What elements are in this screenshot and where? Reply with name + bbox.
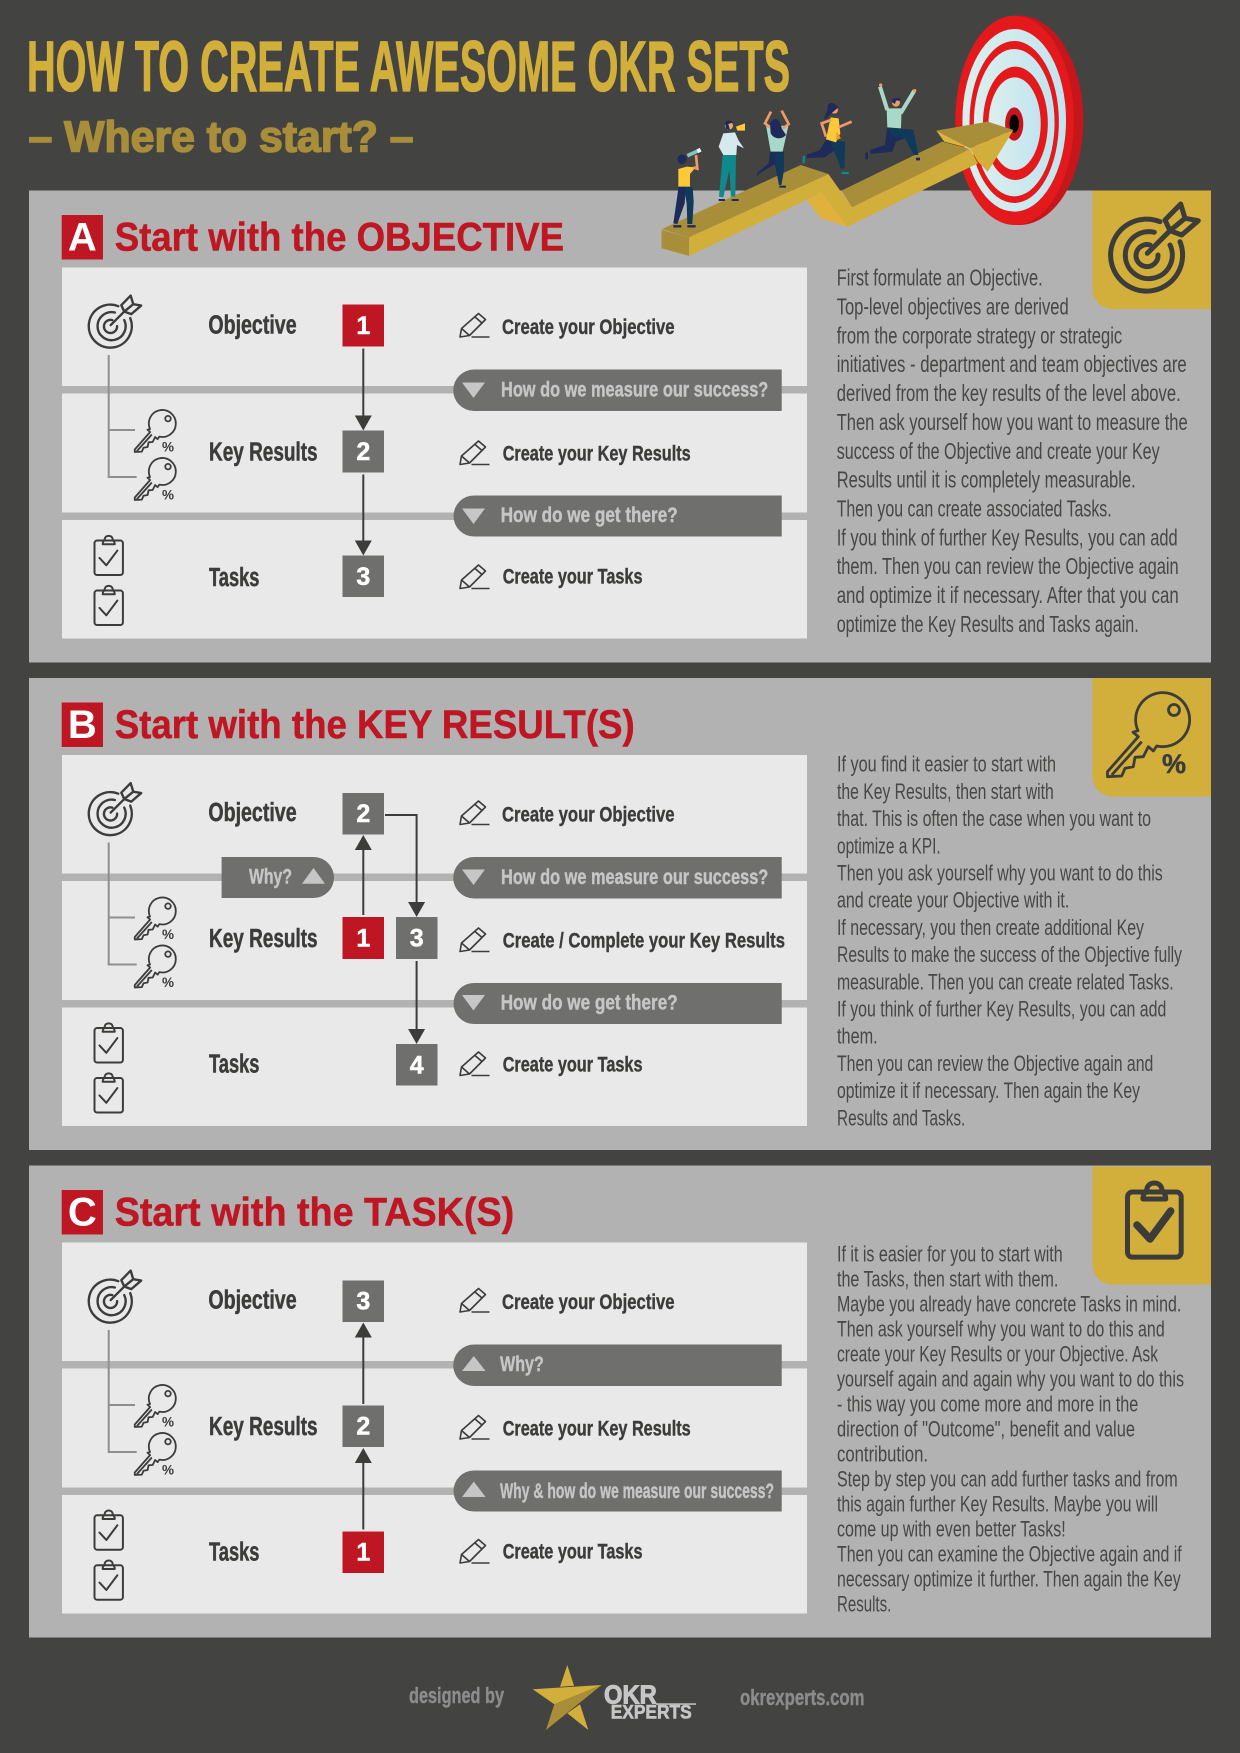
- icons: key results: [135, 1385, 176, 1477]
- step 1: 1: [356, 924, 370, 952]
- icons: key results: %: [162, 927, 174, 942]
- row labels: Key Results: [209, 1413, 318, 1441]
- body text B: the Key Results, then start with: [837, 779, 1054, 804]
- icons: tasks: [94, 1023, 123, 1113]
- icon: objective target: [89, 296, 141, 348]
- panel: B start with the key results: [29, 678, 1211, 1150]
- create actions: Create your Objective: [502, 1291, 675, 1314]
- create actions: Create your Objective: [502, 316, 675, 339]
- connector lines: [109, 842, 137, 964]
- step 4: [396, 1044, 438, 1086]
- callout: how do we measure: [453, 857, 782, 898]
- logo: OKR Experts star: EXPERTS: [611, 1701, 692, 1723]
- row labels: Tasks: [209, 1538, 259, 1566]
- body text A: Then you can create associated Tasks.: [837, 496, 1112, 522]
- create actions: Create your Key Results: [503, 442, 691, 466]
- icons: key results: [135, 897, 176, 990]
- step 1: 1: [356, 312, 370, 340]
- body text C: direction of "Outcome", benefit and value: [837, 1417, 1135, 1442]
- step 2: [342, 1406, 384, 1447]
- flow arrows: [355, 348, 372, 556]
- flow arrows: [355, 815, 425, 1044]
- level rows: [62, 755, 807, 1126]
- gold corner with clipboard icon: [1092, 1166, 1211, 1284]
- callout: how do we get there: How do we get there?: [501, 504, 678, 527]
- flow arrows: [355, 1322, 372, 1530]
- icons: key results: %: [162, 975, 174, 990]
- target board: [955, 16, 1083, 225]
- body text B: optimize a KPI.: [837, 833, 941, 858]
- gold corner with key icon: [1092, 678, 1211, 796]
- icon: objective target: [89, 1271, 141, 1323]
- level rows: [62, 1242, 807, 1614]
- icons: tasks: [94, 1511, 123, 1600]
- heading B: Start with the KEY RESULT(S): [115, 703, 635, 747]
- callout: how do we measure: How do we measure our success?: [501, 866, 768, 889]
- body text A: First formulate an Objective.: [837, 265, 1043, 291]
- callout: how do we get there: How do we get there?: [501, 992, 678, 1014]
- create actions: Create your Tasks: [503, 1540, 642, 1564]
- body text A: [837, 265, 1188, 637]
- level rows: [62, 268, 807, 638]
- body text B: and create your Objective with it.: [837, 888, 1069, 913]
- badge A: A: [68, 216, 97, 260]
- icons: key results: %: [162, 1414, 174, 1430]
- icons: key results: %: [162, 487, 174, 502]
- body text B: [837, 752, 1182, 1130]
- body text A: Top-level objectives are derived: [837, 294, 1069, 320]
- callout: how do we get there: [453, 496, 782, 536]
- step 1: [342, 917, 384, 959]
- callout: how do we measure: [453, 370, 782, 411]
- person with megaphone: [719, 120, 745, 200]
- panel: A start with the objective: [29, 190, 1211, 662]
- panel background C: [29, 1166, 1211, 1638]
- hero illustration: target and arrow: [662, 16, 1083, 256]
- row labels: Objective: [208, 799, 297, 827]
- person with raised arms and long hair: [757, 111, 789, 187]
- body text A: Results until it is completely measurable.: [837, 467, 1136, 493]
- step 4: 4: [410, 1052, 424, 1080]
- badge B: [62, 702, 103, 747]
- callout: why: Why?: [249, 866, 292, 888]
- step 3: 3: [410, 924, 424, 952]
- body text C: Results.: [837, 1592, 891, 1617]
- heading C: Start with the TASK(S): [115, 1190, 514, 1234]
- step 2: [342, 430, 384, 472]
- body text C: contribution.: [837, 1442, 928, 1467]
- callout: how do we get there: [453, 983, 782, 1024]
- create actions: [460, 1288, 691, 1564]
- badge B: B: [68, 703, 97, 747]
- callout: why: [453, 1344, 782, 1386]
- create actions: Create / Complete your Key Results: [503, 929, 785, 952]
- subtitle: – Where to start? –: [28, 113, 414, 162]
- row labels: [208, 1286, 318, 1566]
- body text C: come up with even better Tasks!: [837, 1517, 1066, 1542]
- step 2: [342, 793, 384, 834]
- step 3: [342, 1280, 384, 1322]
- body text B: If you find it easier to start with: [837, 752, 1056, 777]
- step 1: [342, 304, 384, 346]
- body text A: from the corporate strategy or strategic: [837, 322, 1122, 348]
- body text B: them.: [837, 1024, 878, 1049]
- rising arrow: [662, 122, 1013, 256]
- step 2: 2: [356, 800, 370, 828]
- logo: OKR Experts star: OKR: [604, 1681, 657, 1709]
- row labels: [208, 312, 318, 592]
- create actions: Create your Tasks: [503, 1054, 642, 1077]
- icons: key results: %: [162, 1462, 174, 1477]
- step 3: 3: [356, 563, 370, 591]
- cheering man: [867, 83, 920, 159]
- hero illustration: climbing people: [673, 83, 920, 226]
- callout: why: Why?: [500, 1353, 544, 1376]
- step 3: [396, 917, 438, 959]
- create actions: [460, 801, 785, 1077]
- panel: C start with the tasks: [29, 1166, 1211, 1638]
- icons: key results: %: [162, 440, 174, 454]
- icon: objective target: [89, 783, 141, 835]
- row labels: Objective: [208, 1286, 297, 1314]
- body text C: the Tasks, then start with them.: [837, 1267, 1058, 1292]
- icons: tasks: [94, 536, 123, 625]
- connector lines: [109, 1330, 137, 1452]
- callout: how do we measure: How do we measure our success?: [501, 378, 768, 402]
- connector lines: [109, 355, 137, 477]
- person with telescope: [673, 150, 701, 226]
- row labels: Tasks: [209, 564, 259, 592]
- callout: why: [222, 857, 334, 898]
- footer credit: designed by: designed by: [409, 1683, 505, 1708]
- step 1: 1: [356, 1538, 370, 1566]
- callout: why and how do we measure: [453, 1470, 782, 1512]
- create actions: [460, 314, 691, 588]
- create actions: Create your Tasks: [503, 566, 642, 588]
- body text C: [837, 1242, 1184, 1617]
- step 3: 3: [356, 1288, 370, 1316]
- body text B: Results and Tasks.: [837, 1105, 965, 1130]
- create actions: Create your Objective: [502, 804, 675, 826]
- step 1: [342, 1532, 384, 1573]
- gold corner with target icon: [1092, 190, 1211, 309]
- body text C: - this way you come more and more in the: [837, 1392, 1138, 1417]
- heading A: Start with the OBJECTIVE: [115, 216, 564, 260]
- panel background B: [29, 678, 1211, 1150]
- icons: key results: [135, 410, 176, 502]
- badge C: C: [68, 1190, 97, 1234]
- row labels: Tasks: [209, 1051, 259, 1079]
- create actions: Create your Key Results: [503, 1418, 691, 1440]
- running woman: [804, 103, 852, 173]
- step 3: [342, 556, 384, 597]
- callout: why and how do we measure: Why & how do we measure our success?: [500, 1480, 774, 1503]
- footer website: okrexperts.com: [740, 1685, 864, 1710]
- panel background A: [29, 190, 1211, 662]
- row labels: Key Results: [209, 925, 318, 953]
- body text C: If it is easier for you to start with: [837, 1242, 1063, 1267]
- gold corner with key icon: %: [1162, 749, 1186, 779]
- step 2: 2: [356, 438, 370, 466]
- logo: OKR Experts star: [533, 1665, 696, 1730]
- badge A: [62, 215, 103, 260]
- step 2: 2: [356, 1412, 370, 1440]
- row labels: Objective: [208, 312, 297, 340]
- row labels: Key Results: [209, 438, 318, 466]
- badge C: [62, 1190, 103, 1234]
- row labels: [208, 799, 318, 1079]
